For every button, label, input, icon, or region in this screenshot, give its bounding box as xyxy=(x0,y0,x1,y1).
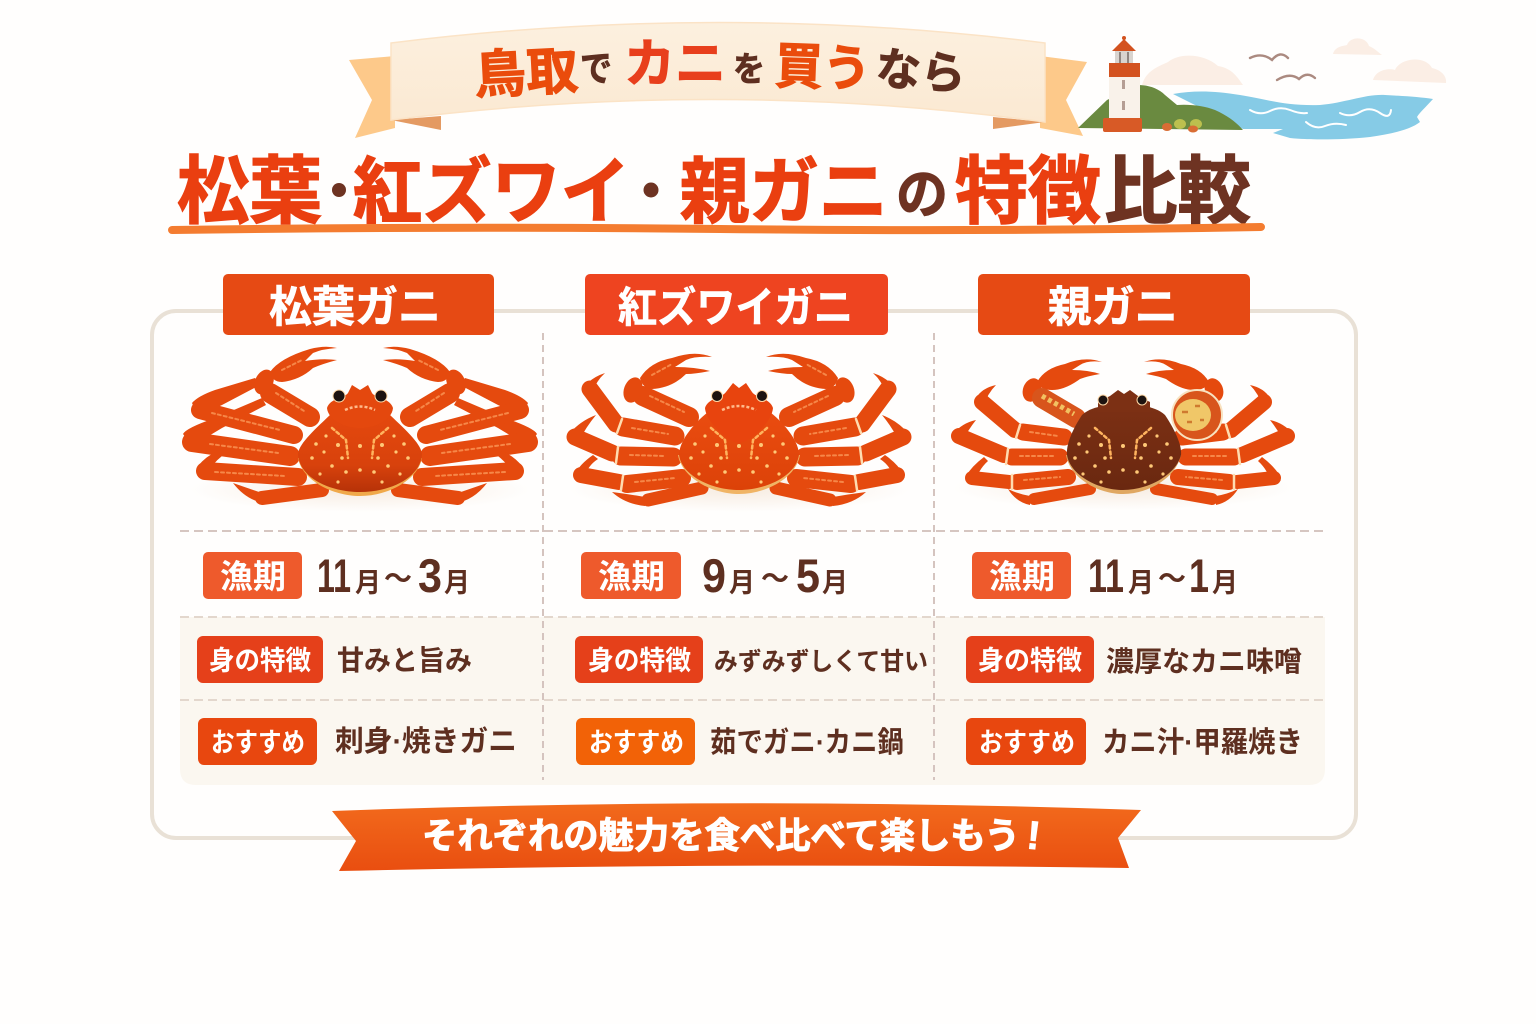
row: 身の特徴: みずみずしくて甘い xyxy=(714,648,928,676)
left arm with roe xyxy=(1042,398,1076,418)
ribbon right tail xyxy=(993,56,1087,136)
ribbon left tail xyxy=(349,56,441,138)
main title: 親ガニ xyxy=(680,153,888,233)
column: 親ガニ xyxy=(953,274,1303,765)
row: おすすめ: おすすめ xyxy=(211,728,305,758)
row: 身の特徴: 甘みと旨み xyxy=(337,645,472,676)
main title: 松葉 xyxy=(177,150,322,233)
main title: の xyxy=(896,165,948,225)
row: 漁期: 1 xyxy=(1189,549,1209,602)
bottom ribbon callout: それぞれの魅力を食べ比べて楽しもう xyxy=(422,815,1020,856)
green headland xyxy=(1078,85,1243,130)
panel: comparison table xyxy=(152,274,1356,838)
banner heading xyxy=(473,36,968,106)
row: おすすめ xyxy=(198,718,517,765)
row: 漁期: 11 xyxy=(317,549,351,602)
bottom ribbon callout xyxy=(332,803,1141,871)
row: 漁期: 11 xyxy=(1088,549,1124,602)
row: 身の特徴: 身の特徴 xyxy=(209,646,311,676)
row: 漁期: 月 xyxy=(355,568,381,598)
row: 身の特徴 xyxy=(966,636,1302,683)
row: 漁期: 月 xyxy=(1212,568,1238,598)
column: 紅ズワイガニ xyxy=(569,274,928,765)
cream rows background xyxy=(180,617,1325,785)
waves xyxy=(1250,108,1391,127)
sea xyxy=(1173,91,1433,139)
roe disc on right arm xyxy=(1172,390,1222,440)
row: 漁期 xyxy=(203,549,470,602)
row: 漁期: 月 xyxy=(729,568,755,598)
icon: matsuba crab xyxy=(183,347,537,512)
row: 漁期: 3 xyxy=(418,549,442,602)
row: おすすめ: おすすめ xyxy=(589,728,684,758)
column header: 親ガニ xyxy=(1048,284,1178,332)
column header xyxy=(978,274,1250,335)
row: おすすめ: おすすめ xyxy=(979,728,1075,758)
banner heading: 買う xyxy=(774,38,872,98)
row: 身の特徴: 濃厚なカニ味噌 xyxy=(1106,646,1302,677)
column header: 松葉ガニ xyxy=(269,284,441,332)
bottom ribbon callout: ! xyxy=(1025,813,1042,859)
row: 漁期: 漁期 xyxy=(220,558,286,595)
top ribbon banner xyxy=(349,22,1087,138)
column header xyxy=(585,274,888,335)
row: 漁期: 月 xyxy=(1128,568,1154,598)
row: おすすめ: カニ汁·甲羅焼き xyxy=(1102,726,1303,759)
clouds xyxy=(1142,38,1446,85)
lighthouse xyxy=(1103,36,1142,132)
row: 漁期 xyxy=(581,549,848,602)
main title: 比較 xyxy=(1104,150,1251,233)
row: 身の特徴 xyxy=(575,636,928,683)
row: 身の特徴: 身の特徴 xyxy=(978,646,1082,676)
main title xyxy=(177,150,1251,233)
row: 身の特徴: 身の特徴 xyxy=(588,646,691,676)
banner heading: を xyxy=(733,51,765,89)
icon: red snow crab xyxy=(569,354,909,512)
row: おすすめ: 刺身·焼きガニ xyxy=(335,725,517,758)
column header: 紅ズワイガニ xyxy=(618,284,853,331)
row: 漁期: 〜 xyxy=(761,563,789,594)
title underline xyxy=(172,227,1261,230)
birds xyxy=(1250,54,1315,80)
table grid xyxy=(180,333,1323,780)
row: 漁期: 〜 xyxy=(1158,563,1186,594)
column header xyxy=(223,274,494,335)
row: おすすめ xyxy=(966,718,1303,765)
shrubs xyxy=(1162,119,1202,132)
panel frame xyxy=(152,311,1356,838)
banner heading: なら xyxy=(874,43,968,100)
banner heading: で xyxy=(580,48,612,89)
row: 漁期: 〜 xyxy=(384,563,412,594)
main title: 紅ズワイ xyxy=(353,153,630,233)
row: 身の特徴 xyxy=(197,636,472,683)
row: 漁期: 月 xyxy=(444,568,470,598)
icon: female crab with roe xyxy=(953,359,1293,510)
main title: 特徴 xyxy=(955,150,1101,233)
row: 漁期: 月 xyxy=(822,568,848,598)
column: 松葉ガニ xyxy=(183,274,537,765)
row: 漁期: 5 xyxy=(796,549,820,602)
row: おすすめ: 茹でガニ·カニ鍋 xyxy=(710,726,904,759)
row: おすすめ xyxy=(576,718,904,765)
row: 漁期: 9 xyxy=(702,549,726,602)
ribbon body xyxy=(391,22,1045,122)
banner heading: 鳥取 xyxy=(473,42,580,106)
row: 漁期: 漁期 xyxy=(598,558,665,595)
banner heading: カニ xyxy=(624,36,726,94)
coastal scene with lighthouse xyxy=(1078,36,1446,139)
row: 漁期 xyxy=(972,549,1238,602)
row: 漁期: 漁期 xyxy=(989,558,1055,595)
